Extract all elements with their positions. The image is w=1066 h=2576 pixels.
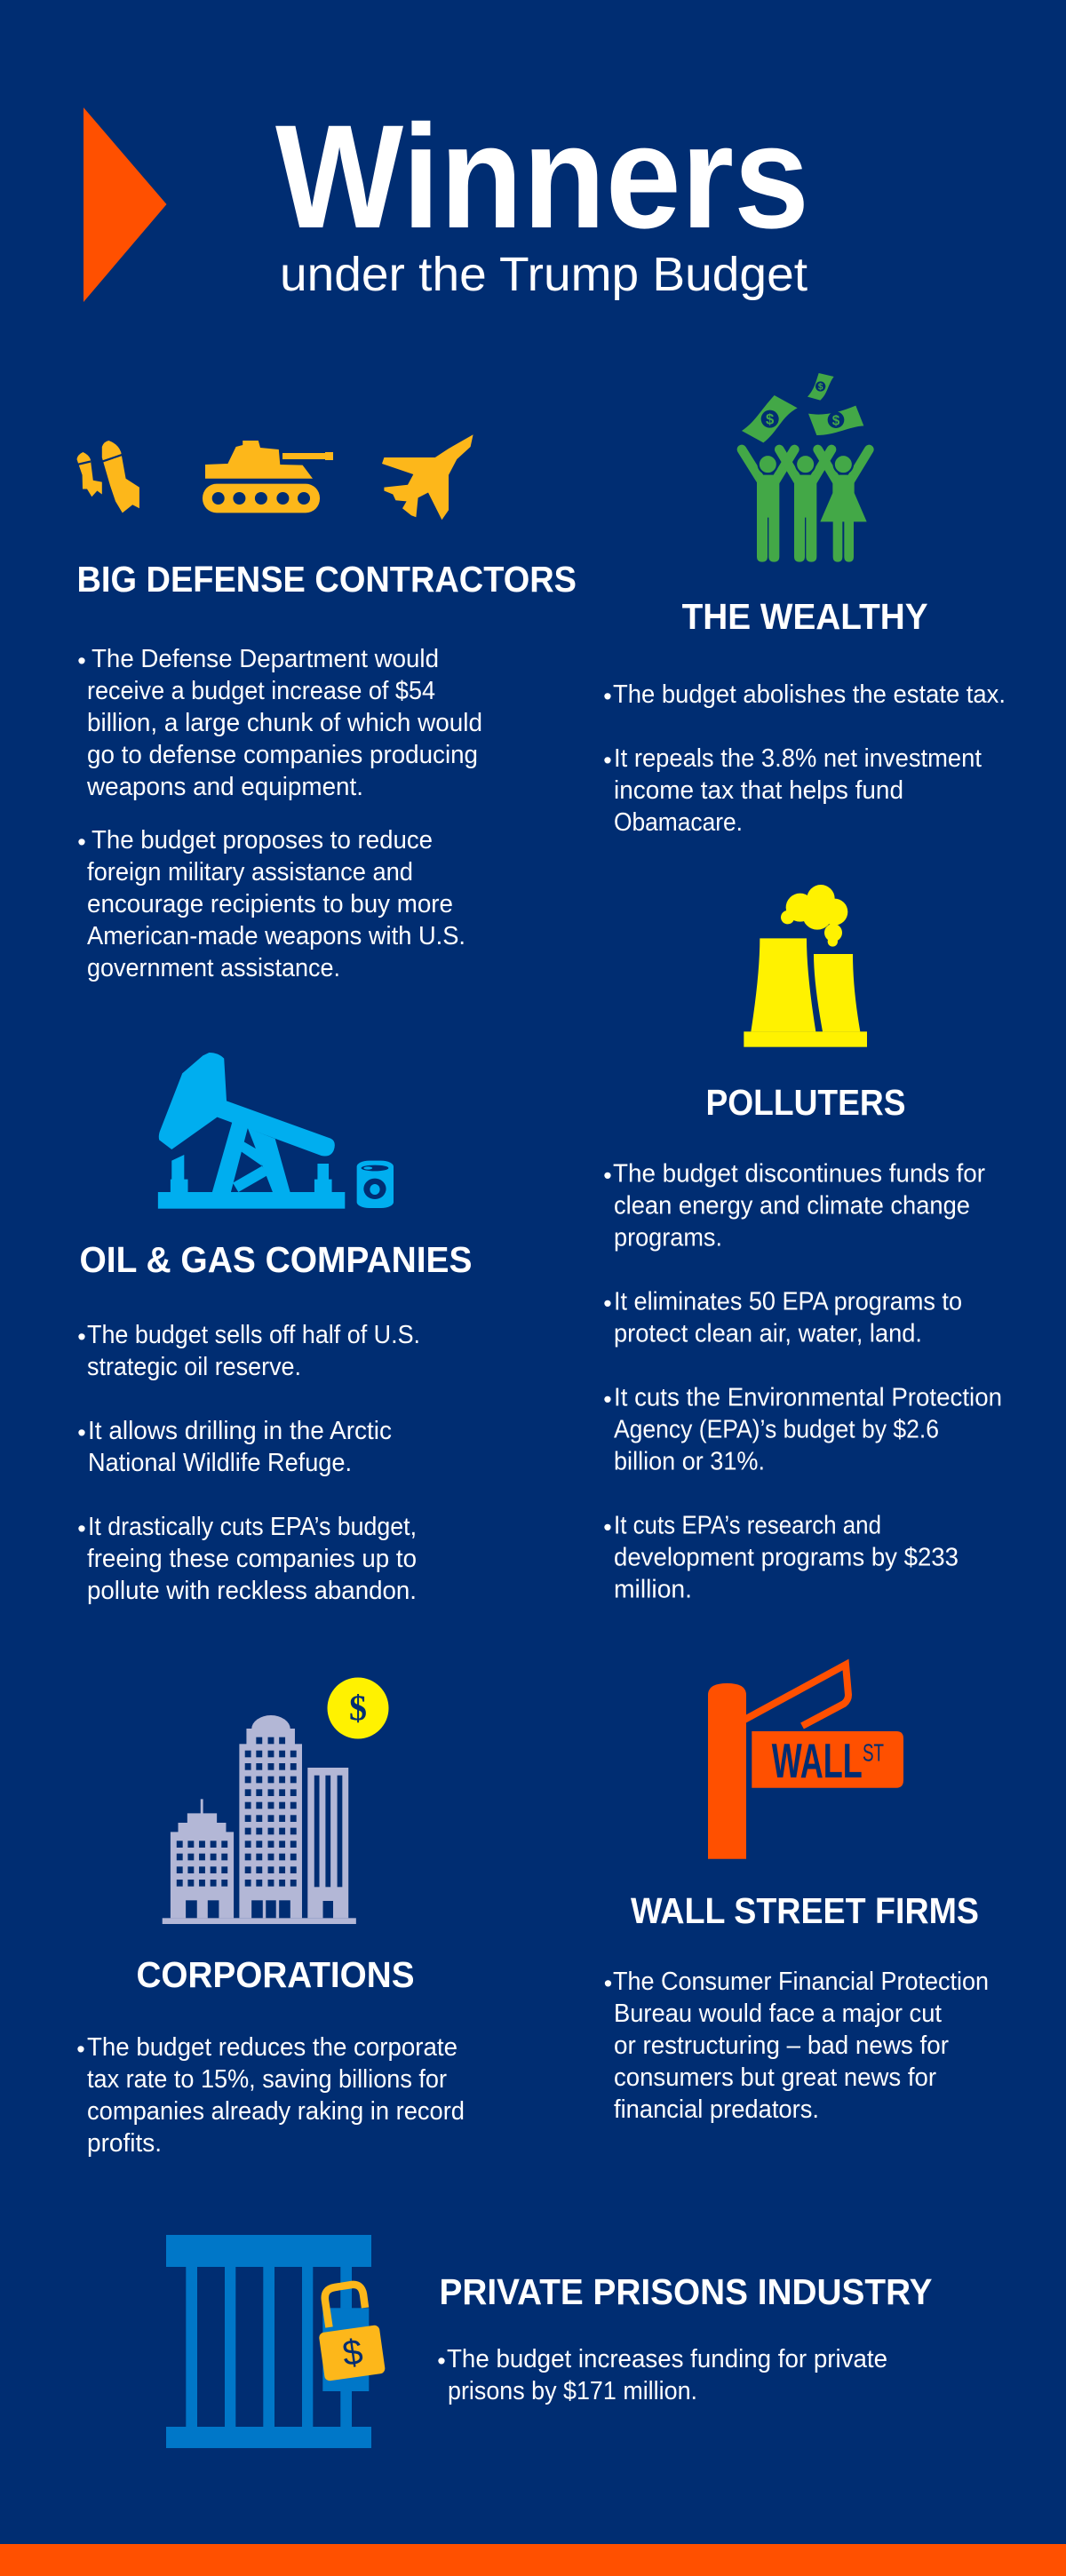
text block: corporations bullets: • [76, 2036, 85, 2063]
icon: cooling towers with smoke [744, 885, 867, 1047]
text block: oil and gas bullets: The budget sells off half of U.S. [87, 1321, 420, 1349]
heading: big defense contractors: BIG DEFENSE CONTRACTORS [76, 559, 577, 600]
icon: three people and falling money: $ [832, 413, 840, 428]
text block: polluters bullets: protect clean air, water, land. [614, 1320, 922, 1348]
text block: oil and gas bullets: pollute with reckless abandon. [87, 1577, 417, 1605]
heading: corporations: CORPORATIONS [137, 1954, 414, 1995]
text block: private prisons bullets: prisons by $171 million. [448, 2377, 697, 2405]
text block: private prisons bullets: • [437, 2348, 446, 2374]
text block: polluters bullets: It cuts the Environmental Protection [614, 1384, 1002, 1412]
heading: the wealthy: THE WEALTHY [682, 596, 928, 637]
text block: defense bullets: encourage recipients to buy more [87, 890, 453, 918]
icon: orange triangle arrow [84, 107, 167, 302]
text block: polluters bullets: development programs by $233 [614, 1544, 959, 1572]
text block: defense bullets: The Defense Department would [91, 645, 439, 673]
text block: wealthy bullets: Obamacare. [614, 808, 743, 837]
text block: defense bullets: • [77, 829, 86, 855]
text block: wealthy bullets: • [603, 683, 612, 710]
text block: polluters bullets: clean energy and climate change [614, 1192, 970, 1220]
panel: polluters [603, 885, 1002, 1604]
text block: defense bullets: go to defense companies producing [87, 741, 478, 769]
text block: polluters bullets: It cuts EPA’s research and [614, 1512, 881, 1540]
panel: wall street firms [604, 1665, 989, 2124]
text block: polluters bullets [603, 1160, 1002, 1604]
text block: oil and gas bullets: strategic oil reserve. [87, 1353, 301, 1381]
icon: three people and falling money: $ [766, 411, 775, 428]
text block: polluters bullets: • [603, 1514, 612, 1540]
text block: private prisons bullets [437, 2345, 887, 2405]
icon: three people and falling money [742, 373, 869, 562]
panel: corporations [76, 1677, 465, 2158]
text block: wall street bullets: or restructuring – bad news for [614, 2031, 949, 2060]
icon: oil pump jack and barrel [158, 1053, 394, 1209]
text block: wealthy bullets [603, 680, 1006, 837]
text block: polluters bullets: programs. [614, 1224, 722, 1252]
panel: big defense contractors [76, 434, 577, 982]
panel: private prisons industry [166, 2235, 933, 2448]
text block: polluters bullets: Agency (EPA)’s budget by $2.6 [614, 1416, 939, 1444]
text block: corporations bullets: The budget reduces the corporate [87, 2033, 457, 2062]
text block: wealthy bullets: The budget abolishes the estate tax. [613, 680, 1006, 709]
text block: defense bullets: • [77, 648, 86, 674]
text block: polluters bullets: It eliminates 50 EPA programs to [614, 1288, 962, 1316]
icon: prison bars with padlock: $ [340, 2333, 365, 2373]
icon: office buildings with dollar coin [163, 1677, 389, 1924]
text block: wealthy bullets: It repeals the 3.8% net investment [614, 744, 982, 773]
text block: oil and gas bullets: • [77, 1324, 86, 1350]
title: Winners [275, 95, 809, 259]
heading: polluters: POLLUTERS [705, 1082, 906, 1123]
heading: wall street firms: WALL STREET FIRMS [631, 1890, 979, 1931]
text block: oil and gas bullets: • [77, 1515, 86, 1542]
icon: office buildings with dollar coin: $ [349, 1688, 367, 1728]
icon: bombs, tank and fighter jet [76, 434, 473, 520]
text block: corporations bullets: companies already raking in record [87, 2097, 465, 2126]
icon: wall street sign: ST [863, 1739, 884, 1767]
text block: wall street bullets: financial predators. [614, 2095, 819, 2124]
text block: oil and gas bullets: freeing these companies up to [87, 1545, 417, 1573]
text block: polluters bullets: • [603, 1162, 612, 1189]
text block: polluters bullets: • [603, 1386, 612, 1412]
text block: wall street bullets: consumers but great news for [614, 2063, 936, 2092]
text block: wall street bullets: Bureau would face a major cut [614, 2000, 942, 2028]
text block: defense bullets: foreign military assistance and [87, 858, 413, 886]
text block: polluters bullets: billion or 31%. [614, 1448, 765, 1476]
text block: polluters bullets: • [603, 1290, 612, 1316]
footer bar [0, 2544, 1066, 2576]
text block: defense bullets: receive a budget increase of $54 [87, 677, 435, 705]
text block: corporations bullets [76, 2033, 465, 2158]
heading: private prisons industry: PRIVATE PRISONS INDUSTRY [439, 2271, 933, 2312]
text block: oil and gas bullets: • [77, 1419, 86, 1446]
icon: three people and falling money: $ [818, 383, 823, 393]
text block: defense bullets: The budget proposes to reduce [91, 826, 433, 855]
text block: wealthy bullets: • [603, 747, 612, 774]
icon: wall street sign [708, 1665, 903, 1859]
text block: defense bullets: weapons and equipment. [86, 773, 363, 801]
text block: corporations bullets: tax rate to 15%, saving billions for [87, 2065, 447, 2094]
text block: wall street bullets: • [604, 1970, 612, 1997]
panel: oil and gas companies [77, 1053, 473, 1605]
text block: oil and gas bullets: It drastically cuts EPA’s budget, [88, 1513, 417, 1541]
text block: private prisons bullets: The budget increases funding for private [447, 2345, 887, 2373]
heading: oil and gas companies: OIL & GAS COMPANIES [80, 1239, 473, 1280]
icon: wall street sign: WALL [772, 1733, 863, 1788]
text block: oil and gas bullets: National Wildlife Refuge. [88, 1449, 352, 1477]
text block: polluters bullets: million. [614, 1576, 692, 1604]
text block: wall street bullets [604, 1968, 989, 2124]
text block: oil and gas bullets: It allows drilling in the Arctic [88, 1417, 392, 1445]
title: under the Trump Budget [280, 248, 807, 301]
text block: defense bullets [77, 645, 482, 982]
text block: defense bullets: American-made weapons with U.S. [87, 922, 465, 950]
panel: the wealthy [603, 373, 1006, 837]
text block: polluters bullets: The budget discontinues funds for [613, 1160, 985, 1189]
text block: defense bullets: government assistance. [87, 954, 340, 982]
text block: corporations bullets: profits. [87, 2129, 162, 2158]
text block: wall street bullets: The Consumer Financial Protection [613, 1968, 989, 1996]
text block: defense bullets: billion, a large chunk of which would [87, 709, 482, 737]
icon: prison bars with padlock [166, 2235, 386, 2448]
text block: oil and gas bullets [77, 1321, 420, 1605]
text block: wealthy bullets: income tax that helps fund [614, 776, 903, 805]
